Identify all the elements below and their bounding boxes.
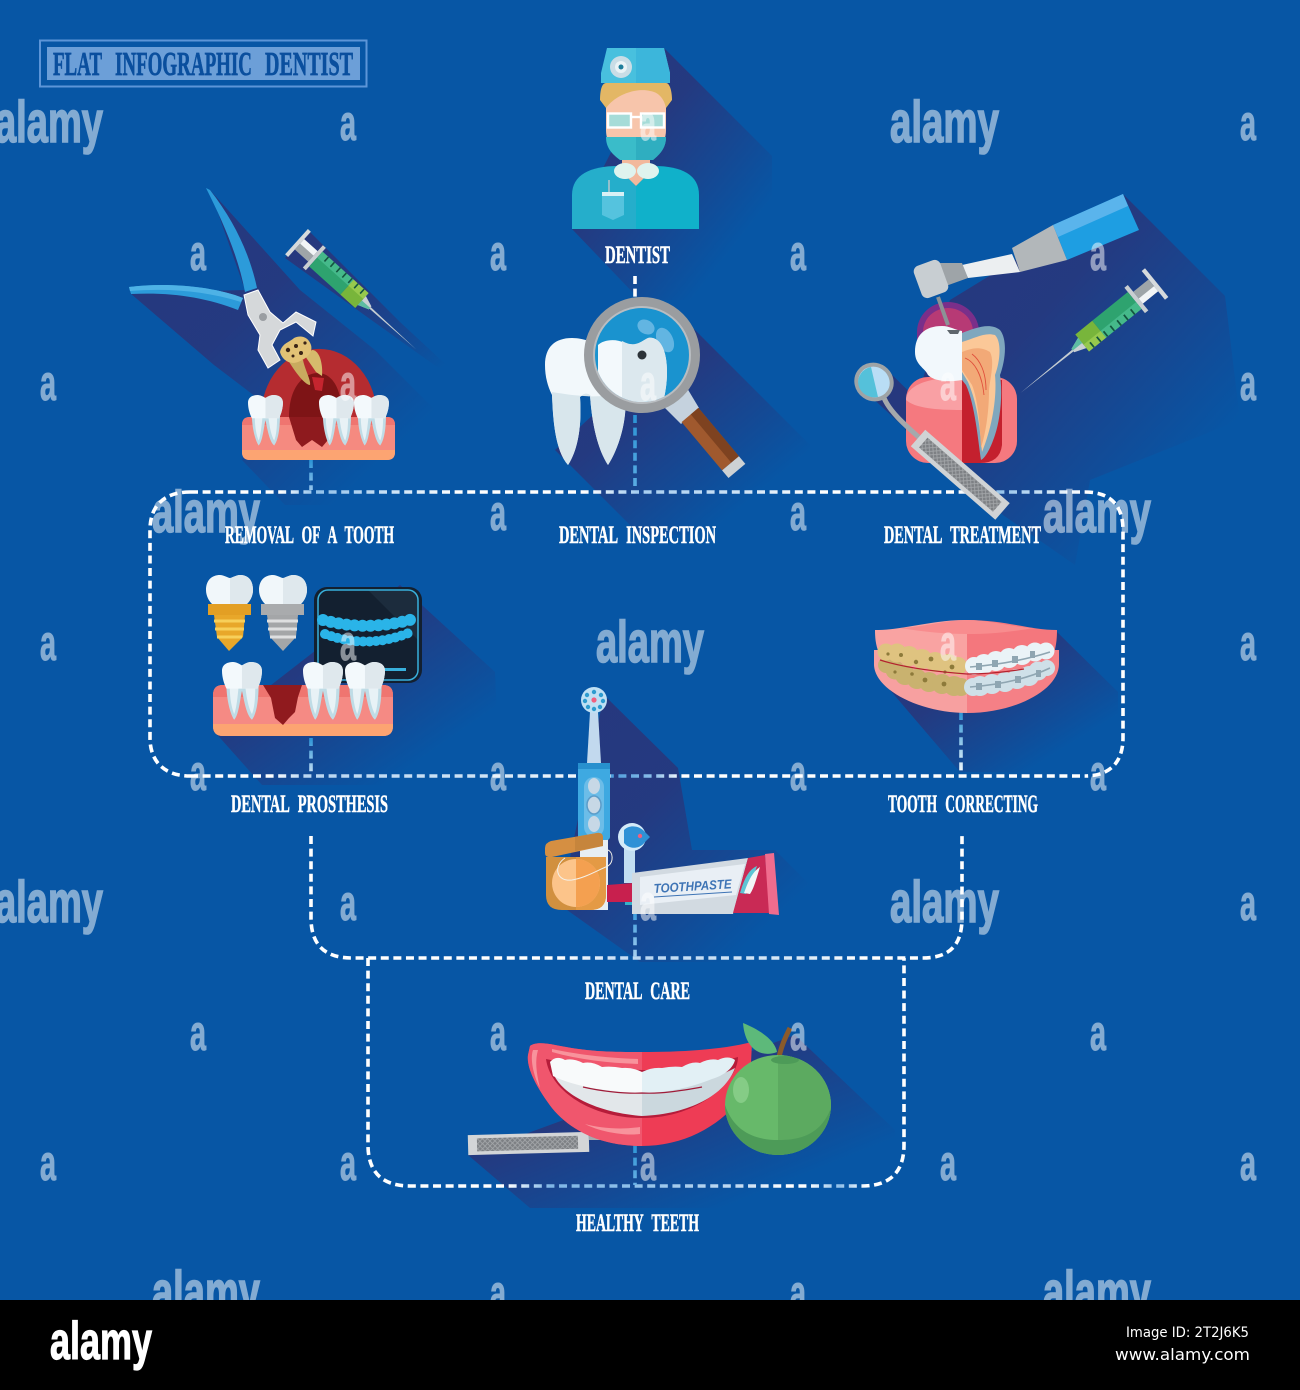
label: healthy teeth: HEALTHY TEETH (576, 1210, 699, 1237)
label: dental prosthesis: DENTAL PROSTHESIS (231, 791, 388, 818)
footer bar (0, 1300, 1300, 1390)
stock watermark: small letters: a (490, 1265, 507, 1321)
stock watermark: large words (0, 90, 1151, 1325)
stock watermark: small letters: a (640, 1135, 657, 1191)
stock watermark: small letters: a (340, 95, 357, 151)
flow chart dashed connectors (150, 276, 1123, 1186)
stock watermark: small letters: a (1240, 95, 1257, 151)
stock watermark: small letters: a (340, 875, 357, 931)
icon: healthy teeth smile with apple (468, 1023, 838, 1160)
stock watermark: small letters: a (790, 225, 807, 281)
stock watermark: small letters: a (490, 225, 507, 281)
title badge: DENTIST (265, 46, 353, 83)
label: removal of a tooth: REMOVAL OF A TOOTH (225, 522, 394, 549)
stock watermark: small letters: a (40, 615, 57, 671)
title badge: FLAT (53, 46, 102, 83)
stock watermark: small letters: a (340, 1135, 357, 1191)
long flat shadows (130, 48, 1240, 1208)
stock watermark: small letters: a (640, 355, 657, 411)
label: dentist: DENTIST (605, 242, 670, 269)
stock watermark: small letters: a (940, 615, 957, 671)
stock watermark: small letters: a (640, 95, 657, 151)
stock watermark: small letters: a (640, 875, 657, 931)
stock watermark: small letters: a (790, 1265, 807, 1321)
footer bar: www.alamy.com (1115, 1345, 1250, 1364)
stock watermark: small letters: a (190, 225, 207, 281)
stock watermark: small letters: a (490, 1005, 507, 1061)
stock watermark: small letters: a (1090, 745, 1107, 801)
stock watermark: large words: alamy (596, 610, 704, 675)
icon: dental prosthesis (206, 575, 422, 736)
stock watermark: large words: alamy (1043, 480, 1151, 545)
icon: dental treatment (850, 194, 1168, 520)
stock watermark: small letters: a (340, 615, 357, 671)
stock watermark: large words: alamy (890, 870, 999, 935)
icon: dentist (572, 48, 699, 229)
icon: dental care products (545, 687, 779, 915)
title badge: INFOGRAPHIC (115, 46, 252, 83)
stock watermark: small letters: a (790, 745, 807, 801)
stock watermark: small letters: a (940, 355, 957, 411)
icon: denture with braces (874, 620, 1059, 713)
stock watermark: small letters: a (490, 745, 507, 801)
label: dental inspection: DENTAL INSPECTION (559, 522, 716, 549)
label: dental care: DENTAL CARE (585, 978, 690, 1005)
stock watermark: small letters: a (790, 485, 807, 541)
stock watermark: small letters: a (940, 1135, 957, 1191)
stock watermark: large words: alamy (1043, 1260, 1151, 1325)
stock watermark: small letters: a (1240, 615, 1257, 671)
label: tooth correcting: TOOTH CORRECTING (888, 791, 1038, 818)
stock watermark: small letters: a (1240, 355, 1257, 411)
stock watermark: large words: alamy (890, 90, 999, 155)
footer bar: alamy (50, 1312, 152, 1371)
stock watermark: small letters: a (40, 1135, 57, 1191)
stock watermark: large words: alamy (152, 480, 260, 545)
icon: dental care products: TOOTHPASTE (653, 876, 732, 896)
title badge (40, 40, 366, 86)
label: dental treatment: DENTAL TREATMENT (884, 522, 1041, 549)
stock watermark: small letters: a (190, 1005, 207, 1061)
stock watermark: small letters: a (1090, 1005, 1107, 1061)
stock watermark: small letters: a (340, 355, 357, 411)
stock watermark: small letters: a (490, 485, 507, 541)
stock watermark: small letters: a (190, 745, 207, 801)
stock watermark: large words: alamy (152, 1260, 260, 1325)
stock watermark: small letters: a (1240, 875, 1257, 931)
stock watermark: small letters: a (40, 355, 57, 411)
icon: tooth under magnifier (545, 302, 745, 478)
stock watermark: small letters: a (790, 1005, 807, 1061)
footer bar: Image ID: 2T2J6K5 (1126, 1325, 1249, 1341)
stock watermark: small letters: a (1090, 225, 1107, 281)
stock watermark: small letters: a (1240, 1135, 1257, 1191)
icon: tooth removal with pliers and syringe (129, 188, 428, 460)
